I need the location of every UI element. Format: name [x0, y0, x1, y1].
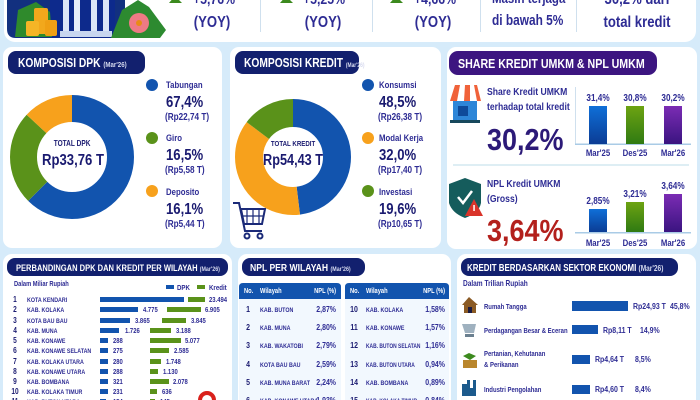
panel: perbandingan DPK dan kredit: [3, 254, 232, 400]
legend: 48,5%: [379, 94, 416, 111]
legend: [362, 79, 423, 229]
heading: SHARE KREDIT UMKM & NPL UMKM: [458, 56, 645, 71]
table: ranks 10 to 15: 1,58%: [425, 304, 445, 314]
legend: Modal Kerja: [379, 132, 423, 143]
bar chart: regions: 3.865: [135, 318, 150, 325]
donut chart: Rp33,76 T: [42, 152, 104, 169]
table: ranks 10 to 15: 14: [350, 377, 359, 387]
NPL text: (Gross): [487, 193, 518, 205]
table: ranks 1 to 6: 2: [246, 322, 251, 332]
table: ranks 1 to 6: KAB. MUNA: [260, 326, 291, 332]
table: ranks 10 to 15: [345, 283, 449, 400]
legend: Konsumsi: [379, 79, 417, 90]
sector: pertanian: Rp4,64 T: [595, 354, 624, 364]
bar chart: share: 30,2%: [661, 92, 685, 103]
sector: pertanian: & Perikanan: [484, 362, 519, 369]
bar chart: regions: 288: [113, 338, 123, 345]
bar chart: regions: [11, 294, 227, 400]
legend: Deposito: [166, 186, 199, 197]
heading: KOMPOSISI DPK (Mar'26): [18, 57, 127, 70]
bar chart: regions: 1.726: [125, 328, 140, 335]
table: ranks 1 to 6: 2,80%: [316, 322, 336, 332]
legend: 32,0%: [379, 147, 416, 164]
table: ranks 1 to 6: 2,87%: [316, 304, 336, 314]
bar chart: regions: 3: [13, 315, 17, 325]
bar chart: share: 30,8%: [623, 92, 647, 103]
sector: industri pengolahan: Industri Pengolahan: [484, 387, 541, 394]
donut chart: [24, 108, 120, 206]
bar chart: NPL: Mar'25: [586, 237, 610, 248]
icon: shopping cart: [233, 203, 265, 238]
NPL note: di bawah 5%: [492, 12, 564, 28]
sector: rumah tangga: Rumah Tangga: [484, 304, 527, 311]
bar chart: regions: 6.905: [205, 307, 220, 314]
donut chart: TOTAL KREDIT: [271, 141, 316, 148]
legend: 16,5%: [166, 147, 203, 164]
panel: komposisi kredit: [230, 47, 441, 248]
bar chart: regions: KOTA KENDARI: [27, 298, 68, 304]
table: ranks 10 to 15: KAB. KOLAKA: [366, 308, 404, 314]
bar chart: regions: 1: [13, 294, 17, 304]
share text: terhadap total kredit: [487, 101, 570, 113]
legend: 16,1%: [166, 201, 203, 218]
legend: (Rp17,40 T): [378, 164, 422, 175]
bar chart: share: Mar'26: [661, 147, 685, 158]
unit note: Dalam Trilian Rupiah: [463, 278, 528, 288]
donut chart: Rp54,43 T: [263, 152, 323, 169]
sector: rumah tangga: Rp24,93 T: [633, 301, 666, 311]
panel: NPL per wilayah: [238, 254, 451, 400]
sector: industri pengolahan: Rp4,60 T: [595, 384, 624, 394]
panel: share kredit UMKM and NPL: [447, 47, 697, 249]
heading: [235, 51, 365, 74]
bar chart: share: 31,4%: [586, 92, 610, 103]
growth stat: DPK: (YOY): [194, 14, 230, 31]
bar chart: regions: 1.748: [166, 359, 181, 366]
heading: PERBANDINGAN DPK DAN KREDIT PER WILAYAH (Mar'26): [16, 262, 220, 273]
bar chart: regions: KAB. KOLAKA: [27, 308, 65, 314]
growth stat: aset: [390, 0, 456, 31]
legend: [166, 285, 227, 292]
growth stat: kredit: [280, 0, 345, 31]
bar chart: regions: 6: [13, 345, 17, 355]
NPL text: NPL Kredit UMKM: [487, 178, 560, 190]
legend: (Rp5,44 T): [165, 218, 205, 229]
sector: perdagangan: 14,9%: [640, 325, 660, 335]
bar chart: regions: 5.077: [185, 338, 200, 345]
table: ranks 10 to 15: No.: [350, 288, 359, 295]
bar chart: regions: KOTA BAU BAU: [27, 319, 68, 325]
legend: 67,4%: [166, 94, 203, 111]
sector: perdagangan: [462, 324, 660, 337]
legend: Giro: [166, 132, 182, 143]
legend: DPK: [177, 285, 190, 292]
share text: 30,2%: [487, 123, 564, 157]
growth stat: aset: (YOY): [415, 14, 451, 31]
bar chart: regions: 9: [13, 376, 17, 386]
table: ranks 1 to 6: NPL (%): [314, 288, 336, 295]
heading: [449, 51, 657, 75]
legend: Kredit: [209, 285, 227, 292]
table: ranks 10 to 15: KAB. BUTON UTARA: [366, 363, 415, 369]
table: ranks 10 to 15: 12: [350, 340, 359, 350]
legend: (Rp5,58 T): [165, 164, 205, 175]
legend: 19,6%: [379, 201, 416, 218]
bar chart: regions: 1.130: [163, 369, 178, 376]
table: ranks 1 to 6: 4: [246, 359, 251, 369]
table: ranks 1 to 6: 5: [246, 377, 251, 387]
bar chart: regions: KAB. MUNA: [27, 329, 58, 335]
donut chart: TOTAL DPK: [54, 138, 91, 148]
bar chart: regions: 23.494: [209, 297, 227, 304]
bar chart: regions: 231: [113, 389, 123, 396]
bar chart: regions: 4: [13, 325, 18, 335]
bar chart: regions: 636: [162, 389, 172, 396]
legend: (Rp22,74 T): [165, 111, 209, 122]
heading: KREDIT BERDASARKAN SEKTOR EKONOMI (Mar'26): [467, 262, 664, 273]
table: ranks 10 to 15: 1,16%: [425, 340, 445, 350]
bar chart: regions: KAB. KONAWE UTARA: [27, 370, 86, 376]
legend: [146, 79, 209, 229]
growth stat: kredit: (YOY): [305, 14, 341, 31]
bar chart: NPL: 3,21%: [623, 188, 647, 199]
heading: NPL PER WILAYAH (Mar'26): [250, 262, 351, 274]
icon: store: [450, 85, 481, 123]
icon: shield with warning: [449, 178, 483, 218]
bar chart: regions: 2.585: [174, 348, 189, 355]
table: ranks 1 to 6: 1: [246, 304, 251, 314]
NPL text: 3,64%: [487, 214, 564, 248]
legend: (Rp10,65 T): [378, 218, 422, 229]
bar chart: regions: 275: [113, 348, 123, 355]
table: ranks 10 to 15: 11: [350, 322, 358, 332]
illustration: bank with coins and flower: [7, 0, 166, 38]
bar chart: regions: KAB. BOMBANA: [27, 380, 70, 386]
bar chart: regions: 7: [13, 356, 17, 366]
NPL note: [492, 0, 566, 28]
table: ranks 1 to 6: 2,24%: [316, 377, 336, 387]
NPL text: [487, 178, 564, 248]
bar chart: share: [575, 87, 691, 158]
table: ranks 10 to 15: 0,94%: [425, 359, 445, 369]
icon: map pin: [200, 393, 214, 400]
table: ranks 10 to 15: 10: [350, 304, 358, 314]
table: ranks 1 to 6: KOTA BAU BAU: [260, 363, 301, 369]
bar chart: regions: 2.078: [173, 379, 188, 386]
bar chart: share: Mar'25: [586, 147, 610, 158]
bar chart: regions: 2: [13, 304, 17, 314]
growth stat: DPK: [169, 0, 235, 31]
table: ranks 1 to 6: Wilayah: [260, 288, 282, 295]
table: ranks 1 to 6: KAB. MUNA BARAT: [260, 381, 310, 387]
sector: pertanian: Pertanian, Kehutanan: [484, 351, 545, 358]
share text: Share Kredit UMKM: [487, 86, 567, 98]
table: ranks 10 to 15: 1,57%: [425, 322, 445, 332]
share text: [487, 86, 570, 157]
table: ranks 1 to 6: 2,79%: [316, 340, 336, 350]
heading: [461, 258, 678, 276]
sector: industri pengolahan: 8,4%: [635, 384, 651, 394]
top summary panel: [4, 0, 696, 42]
unit note: Dalam Miliar Rupiah: [14, 281, 69, 288]
table: ranks 1 to 6: KAB. BUTON: [260, 308, 293, 314]
bar chart: NPL: Mar'26: [661, 237, 685, 248]
bar chart: regions: 321: [113, 379, 123, 386]
heading: [242, 258, 365, 276]
bar chart: regions: KAB. KOLAKA UTARA: [27, 360, 84, 366]
donut chart: [249, 113, 337, 201]
table: ranks 1 to 6: 3: [246, 340, 251, 350]
bar chart: NPL: Des'25: [623, 237, 648, 248]
heading: [8, 51, 145, 74]
bar chart: share: Des'25: [623, 147, 648, 158]
table: ranks 10 to 15: NPL (%): [423, 288, 445, 295]
table: ranks 10 to 15: KAB. KONAWE: [366, 326, 404, 332]
bar chart: regions: KAB. KOLAKA TIMUR: [27, 390, 83, 396]
panel: kredit berdasarkan sektor ekonomi: [457, 254, 696, 400]
legend: Investasi: [379, 186, 412, 197]
legend: Tabungan: [166, 79, 203, 90]
heading: KOMPOSISI KREDIT (Mar'26): [244, 57, 365, 70]
table: ranks 1 to 6: 2,59%: [316, 359, 336, 369]
table: ranks 1 to 6: No.: [244, 288, 253, 295]
bar chart: regions: 288: [113, 369, 123, 376]
bar chart: regions: 280: [113, 359, 123, 366]
bar chart: regions: 5: [13, 335, 17, 345]
sector: rumah tangga: [462, 297, 690, 313]
table: ranks 1 to 6: KAB. WAKATOBI: [260, 344, 303, 350]
table: ranks 1 to 6: [239, 283, 341, 400]
sector: perdagangan: Rp8,11 T: [603, 325, 632, 335]
sector: pertanian: 8,5%: [635, 354, 651, 364]
bar chart: regions: 8: [13, 366, 17, 376]
sector: rumah tangga: 45,8%: [670, 301, 690, 311]
legend: (Rp26,38 T): [378, 111, 422, 122]
bar chart: NPL: 2,85%: [586, 195, 610, 206]
bar chart: regions: 10: [11, 386, 19, 396]
bar chart: regions: KAB. KONAWE: [27, 339, 65, 345]
bar chart: NPL: 3,64%: [661, 180, 685, 191]
table: ranks 10 to 15: Wilayah: [366, 288, 388, 295]
panel: komposisi DPK: [3, 47, 222, 248]
table: ranks 10 to 15: KAB. BOMBANA: [366, 381, 409, 387]
table: ranks 10 to 15: 0,89%: [425, 377, 445, 387]
bar chart: regions: 3.188: [176, 328, 191, 335]
bar chart: regions: 3.845: [191, 318, 206, 325]
heading: [7, 258, 228, 276]
sector: perdagangan: Perdagangan Besar & Eceran: [484, 328, 568, 335]
bar chart: regions: 4.775: [143, 307, 158, 314]
UMKM note: total kredit: [603, 14, 671, 31]
bar chart: regions: KAB. KONAWE SELATAN: [27, 349, 91, 355]
table: ranks 10 to 15: KAB. BUTON SELATAN: [366, 344, 421, 350]
table: ranks 10 to 15: 13: [350, 359, 359, 369]
bar chart: NPL: [575, 180, 691, 248]
sector: industri pengolahan: [462, 380, 651, 396]
UMKM note: [603, 0, 671, 31]
sector: pertanian: [463, 351, 651, 369]
